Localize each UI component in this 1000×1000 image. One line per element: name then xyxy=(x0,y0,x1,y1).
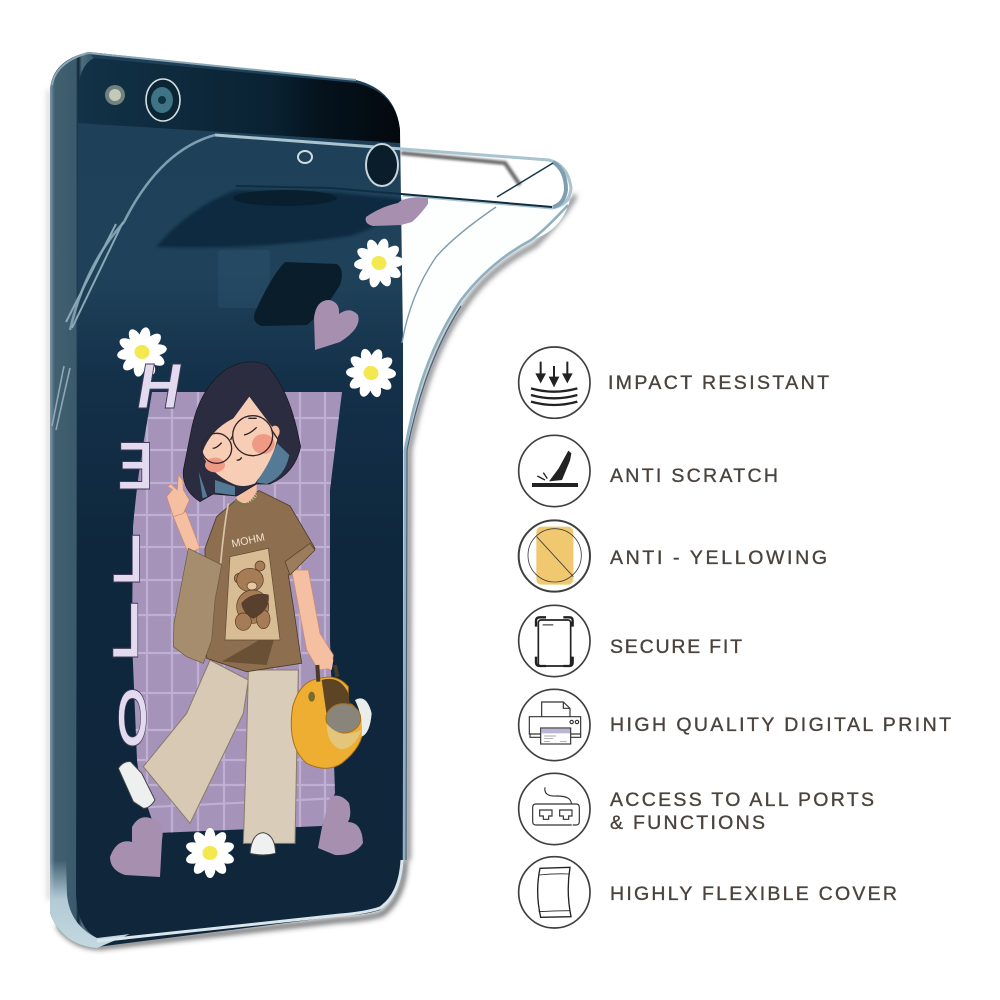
white opening behind the case xyxy=(401,151,554,200)
icon: port block xyxy=(519,773,590,845)
label: ANTI - YELLOWING xyxy=(610,547,827,569)
case bump shadow xyxy=(156,190,402,248)
lettering HELLO, mirrored: O xyxy=(117,674,148,763)
shadow in case opening xyxy=(401,153,520,185)
bottom left corner xyxy=(50,860,130,948)
flash xyxy=(105,85,125,105)
feature: flexible cover xyxy=(519,857,897,928)
side button xyxy=(66,222,123,328)
case inner lower line xyxy=(236,186,552,207)
camera cut-out xyxy=(366,144,398,186)
camera lens xyxy=(146,79,180,121)
face xyxy=(202,397,278,486)
sleeve cuff xyxy=(285,543,315,575)
phone top glass band xyxy=(76,58,400,143)
feature: digital print xyxy=(519,689,951,761)
phone body xyxy=(50,52,403,947)
label line two: & FUNCTIONS xyxy=(610,812,765,834)
handbag eye xyxy=(308,692,315,702)
glasses xyxy=(202,416,278,463)
tote bag xyxy=(173,548,222,663)
lower side button xyxy=(52,366,70,430)
neck xyxy=(235,478,257,503)
left trouser leg xyxy=(143,660,248,823)
label: HIGH QUALITY DIGITAL PRINT xyxy=(610,714,951,736)
eyes xyxy=(213,418,257,460)
feature: impact resistant xyxy=(519,347,829,418)
icon: yellow phone crossed xyxy=(519,520,590,592)
daisy top xyxy=(348,233,410,293)
right cheek xyxy=(252,434,275,454)
checked purple panel xyxy=(132,392,342,833)
print text: MOHM xyxy=(230,532,266,550)
case drop shadow xyxy=(49,90,575,947)
right arm xyxy=(292,570,333,670)
icon: impact arrows xyxy=(519,347,590,418)
lettering HELLO, mirrored: L xyxy=(111,586,141,674)
lettering HELLO, mirrored: H xyxy=(132,351,188,422)
feature: anti scratch xyxy=(519,435,778,507)
daisy bottom xyxy=(185,828,235,878)
phone artwork xyxy=(110,198,428,878)
case outer curve xyxy=(404,205,568,860)
daisy right xyxy=(339,341,403,405)
t-shirt xyxy=(205,491,315,672)
case left curve xyxy=(70,135,215,330)
icon: phone with corner bumpers xyxy=(519,605,590,677)
icon: printer xyxy=(519,689,590,761)
label: IMPACT RESISTANT xyxy=(608,372,829,394)
left cheek xyxy=(205,458,225,472)
teddy bear xyxy=(234,561,270,630)
shirt shadow xyxy=(222,630,277,665)
hair blue tips left xyxy=(199,472,235,498)
handbag opening xyxy=(322,679,350,715)
print panel xyxy=(225,548,280,640)
top slot xyxy=(233,190,337,206)
handbag xyxy=(291,677,363,768)
raised arm xyxy=(173,512,200,553)
heart: bottom right xyxy=(318,795,363,855)
left shoe xyxy=(118,762,155,808)
fingerprint cut-out xyxy=(254,262,342,326)
heart: centre xyxy=(314,300,359,350)
feature: secure fit xyxy=(519,605,742,677)
feature: ports xyxy=(519,773,874,845)
label: SECURE FIT xyxy=(610,636,742,658)
feature: anti yellowing xyxy=(519,520,827,592)
handbag wing xyxy=(355,698,372,737)
top rim highlight xyxy=(52,53,356,85)
case tip thickening xyxy=(553,162,566,207)
hand on handle xyxy=(308,648,333,670)
label: ACCESS TO ALL PORTS xyxy=(610,789,874,811)
handbag handle xyxy=(317,665,337,682)
icon: blade scratching xyxy=(519,435,590,507)
necklace xyxy=(235,493,257,504)
tip diagonal xyxy=(497,163,553,197)
phone left edge xyxy=(50,52,97,947)
feature list xyxy=(519,347,951,928)
case bump square xyxy=(218,250,270,308)
daisy left xyxy=(113,323,171,381)
right trouser leg xyxy=(243,670,298,843)
icon: bent cover xyxy=(519,857,590,928)
bottom rim highlight xyxy=(97,860,402,941)
tote strap xyxy=(221,503,228,563)
case outer dark line xyxy=(406,306,461,860)
girl illustration xyxy=(118,362,372,855)
raised fingers xyxy=(167,475,189,517)
phone in clear case xyxy=(49,52,575,948)
clear case right flap xyxy=(403,190,572,450)
lettering HELLO, mirrored: E xyxy=(118,428,153,503)
right shoe xyxy=(250,833,276,855)
handbag lower glass xyxy=(327,723,362,749)
lettering HELLO, mirrored: L xyxy=(112,521,143,597)
label: ANTI SCRATCH xyxy=(610,465,778,487)
hair back xyxy=(183,362,301,502)
lettering HELLO, mirrored xyxy=(111,351,188,763)
heart: bottom left xyxy=(110,817,163,877)
panel grid xyxy=(130,390,345,840)
hair blue tips right xyxy=(257,443,289,484)
small mic hole xyxy=(298,151,312,163)
case rim xyxy=(215,135,571,208)
case flap inner line xyxy=(402,207,496,343)
label: HIGHLY FLEXIBLE COVER xyxy=(610,883,897,905)
handbag clear pocket xyxy=(326,704,361,733)
ear xyxy=(270,426,280,438)
heart: top fragment xyxy=(366,198,428,226)
